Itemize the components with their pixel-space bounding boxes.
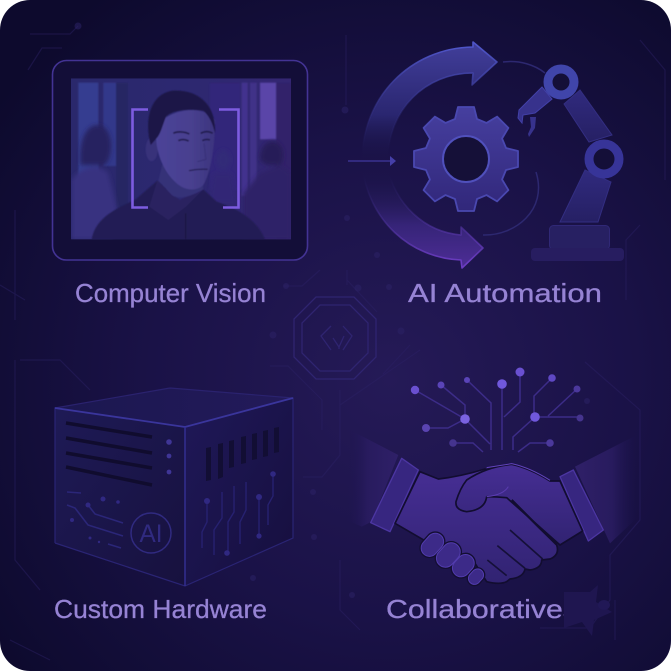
AI badge: [131, 513, 171, 553]
right hand with thumb: [456, 464, 583, 545]
digital network tree: [411, 368, 584, 452]
man's hair: [148, 91, 215, 145]
knuckles: [418, 530, 486, 587]
man's face: [156, 110, 215, 189]
status LEDs: [166, 439, 172, 474]
icon: robot arm: [518, 69, 624, 261]
icon: gear: [414, 107, 518, 211]
AI badge: AI: [140, 520, 162, 548]
left sleeve: [347, 430, 398, 527]
panel: AI automation: [348, 42, 624, 308]
focus bracket left: [132, 110, 148, 208]
handshake illustration: [347, 430, 637, 587]
portrait photo: [71, 78, 291, 239]
front circuit traces: [67, 492, 123, 548]
panel: computer vision: [52, 60, 308, 308]
focus bracket right: [219, 110, 238, 208]
right cuff: [560, 470, 603, 541]
server box front: [55, 408, 185, 586]
server box side: [185, 398, 293, 586]
right sleeve: [575, 435, 637, 543]
man: [92, 91, 265, 239]
man's ear: [146, 139, 158, 161]
arrow: input: [348, 156, 396, 166]
side vent slots: [206, 427, 279, 481]
heading: Collaboratives: Collaboratives: [386, 594, 578, 624]
man's shirt: [92, 181, 265, 239]
knuckle shadows: [418, 530, 486, 587]
panel: collaborative: [347, 368, 637, 636]
thin orbit arcs: [483, 62, 545, 235]
arrow: cycle top: [362, 42, 497, 160]
centre octagon chip emblem: [294, 297, 376, 379]
man's neck: [158, 160, 203, 197]
smudged star mark: [564, 585, 612, 636]
arrow: cycle bottom: [362, 165, 483, 268]
heading: Custom Hardware: Custom Hardware: [54, 594, 267, 624]
front vent slots: [66, 423, 152, 485]
side circuit traces: [202, 471, 276, 556]
panel: custom hardware: [54, 388, 293, 624]
heading: Computer Vision: Computer Vision: [75, 278, 266, 308]
server box top: [55, 388, 293, 427]
device frame: [52, 60, 308, 260]
left cuff: [371, 458, 418, 532]
heading: AI Automation: AI Automation: [408, 278, 602, 308]
circuit background nodes: [74, 22, 590, 598]
blurred colleagues: [72, 125, 291, 239]
man's eyes, brows and mouth: [173, 132, 213, 171]
left hand: [395, 469, 557, 583]
finger creases: [487, 514, 548, 576]
